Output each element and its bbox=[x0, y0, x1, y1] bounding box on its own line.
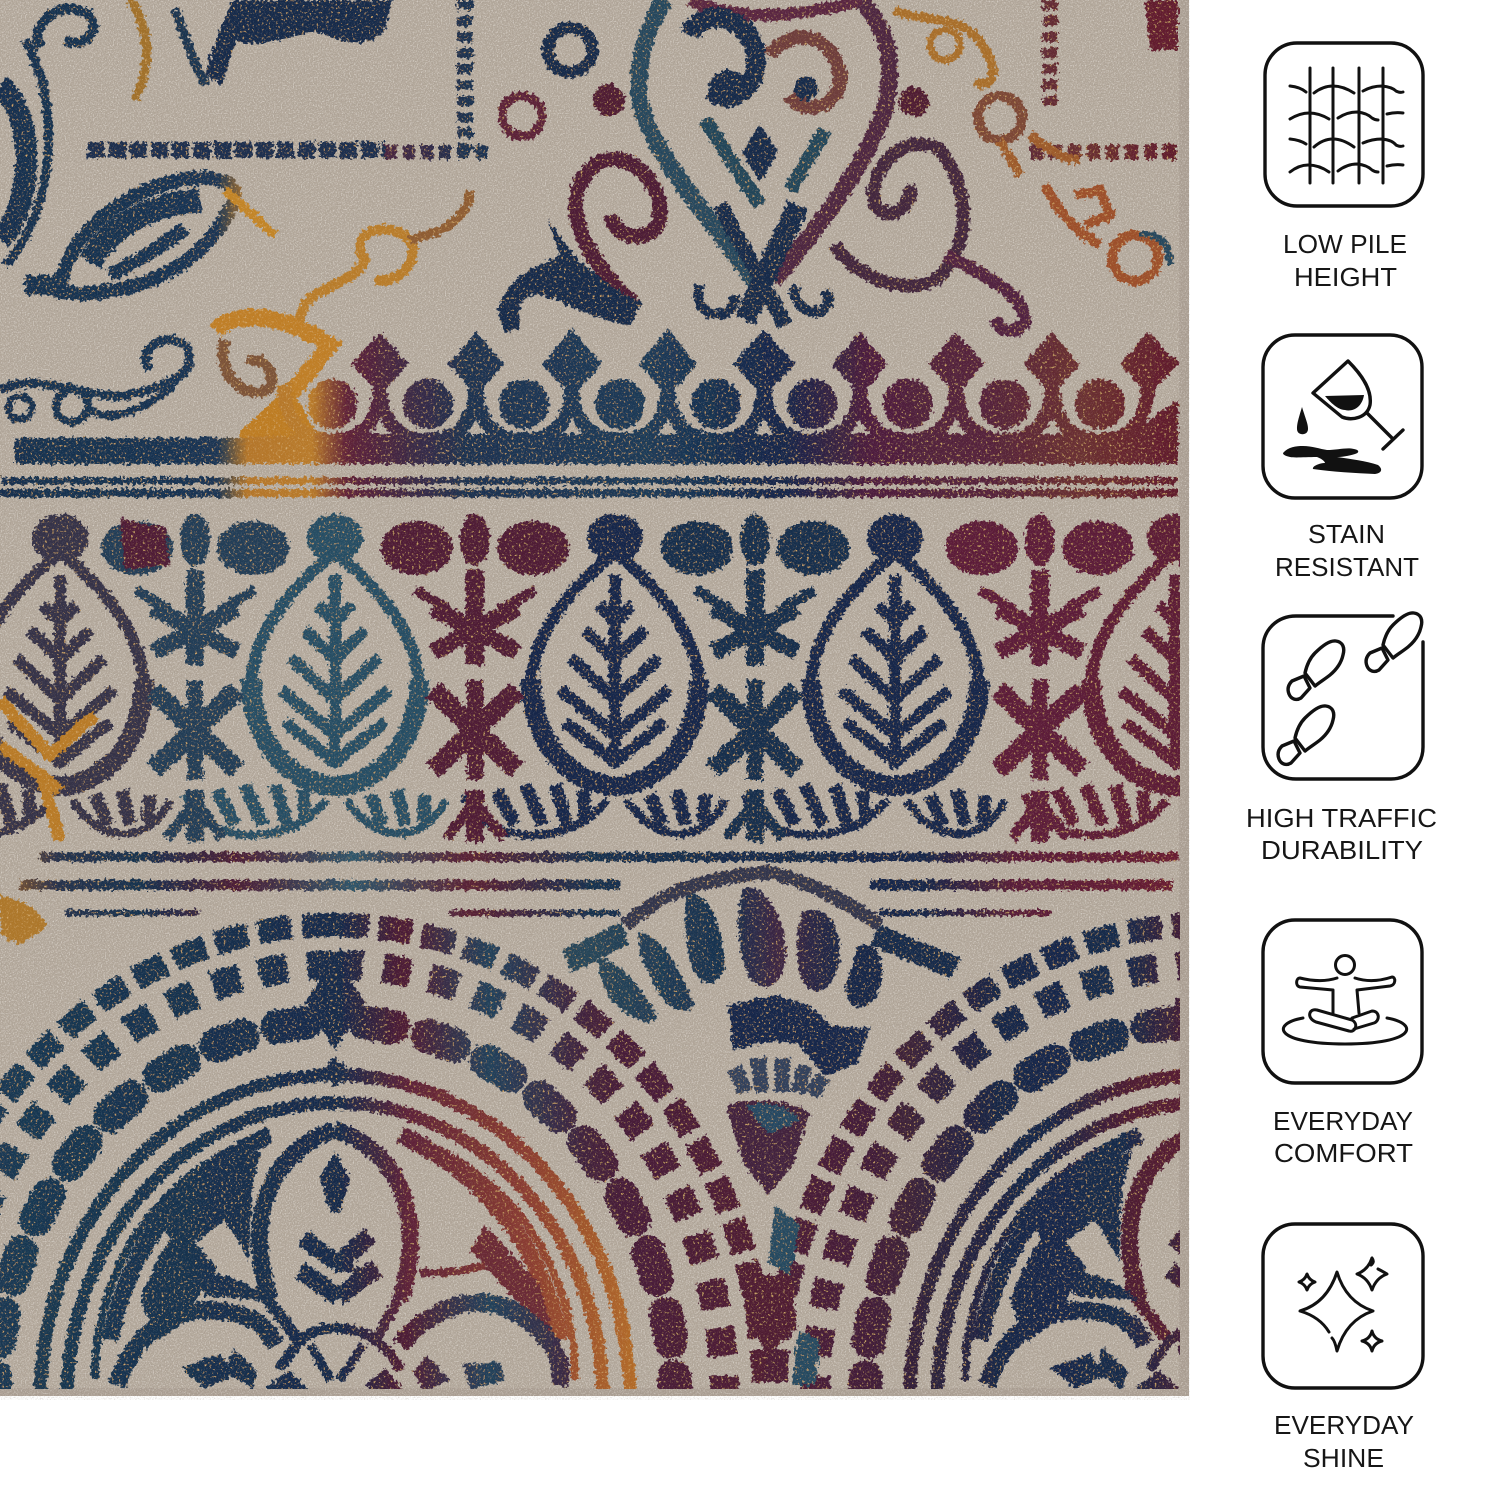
feature: everyday shine bbox=[1263, 1224, 1423, 1473]
lines under middle band bbox=[40, 852, 1178, 862]
icon: sparkles bbox=[1263, 1224, 1423, 1388]
scallop row bbox=[352, 329, 1179, 397]
label bbox=[1274, 1410, 1414, 1473]
feature: everyday comfort bbox=[1263, 920, 1422, 1168]
left scroll leaf bbox=[60, 178, 234, 293]
left medallion bbox=[0, 925, 765, 1400]
feature: high traffic durability bbox=[1246, 613, 1437, 865]
label: SHINE bbox=[1303, 1443, 1384, 1473]
leaf medallions bbox=[0, 514, 1285, 835]
pile sheen bbox=[0, 0, 1180, 1389]
fan navy band bbox=[728, 995, 870, 1076]
label: DURABILITY bbox=[1261, 835, 1423, 865]
icon: seated meditation figure bbox=[1263, 920, 1422, 1083]
bottom panel bbox=[0, 872, 1235, 1400]
central left scroll bbox=[576, 160, 660, 305]
base pile texture bbox=[0, 0, 1189, 1396]
feature: stain resistant bbox=[1263, 335, 1422, 582]
fan arch bbox=[625, 872, 880, 925]
label bbox=[1283, 229, 1407, 292]
orange swirl bbox=[215, 317, 330, 395]
top left medallion arc bbox=[0, 85, 26, 240]
label: HIGH TRAFFIC bbox=[1246, 803, 1437, 833]
label bbox=[1275, 519, 1419, 582]
label: EVERYDAY bbox=[1273, 1106, 1413, 1136]
label: HEIGHT bbox=[1294, 262, 1397, 292]
label: COMFORT bbox=[1274, 1138, 1413, 1168]
left orange accent bbox=[0, 700, 95, 840]
top panel motifs bbox=[0, 0, 1179, 493]
label bbox=[1246, 803, 1437, 865]
central fan bbox=[562, 872, 962, 1385]
icon: spilled wine glass bbox=[1263, 335, 1422, 498]
lower left scroll bbox=[0, 340, 190, 396]
label: STAIN bbox=[1308, 519, 1385, 549]
rug edge binding bbox=[0, 0, 1189, 1396]
rug pattern bbox=[0, 0, 1285, 1400]
right medallion bbox=[775, 925, 1235, 1400]
rug base field bbox=[0, 0, 1179, 1388]
central heart motif bbox=[639, 0, 762, 292]
star columns bbox=[101, 514, 1134, 842]
label: RESISTANT bbox=[1275, 552, 1419, 582]
top left scroll bbox=[38, 9, 93, 48]
lower small fan bbox=[735, 1058, 824, 1095]
central right scroll bbox=[835, 144, 964, 286]
icon: footprints bbox=[1263, 613, 1423, 779]
orange scrolls bbox=[300, 230, 413, 322]
horizontal lines under scallops bbox=[0, 478, 1178, 484]
left orange patch bbox=[0, 895, 48, 945]
right orange scrolls bbox=[1045, 185, 1110, 245]
horizontal dashed band bbox=[88, 142, 385, 158]
rug photo bbox=[0, 0, 1285, 1400]
icon: low pile weave bbox=[1265, 43, 1423, 206]
feature: low pile height bbox=[1265, 43, 1423, 292]
base pile shading bbox=[0, 0, 1189, 1396]
upper scroll ornaments bbox=[548, 28, 592, 72]
top navy shape bbox=[205, 0, 392, 85]
label: LOW PILE bbox=[1283, 229, 1407, 259]
label: EVERYDAY bbox=[1274, 1410, 1414, 1440]
middle band bbox=[0, 514, 1285, 945]
label bbox=[1273, 1106, 1413, 1168]
